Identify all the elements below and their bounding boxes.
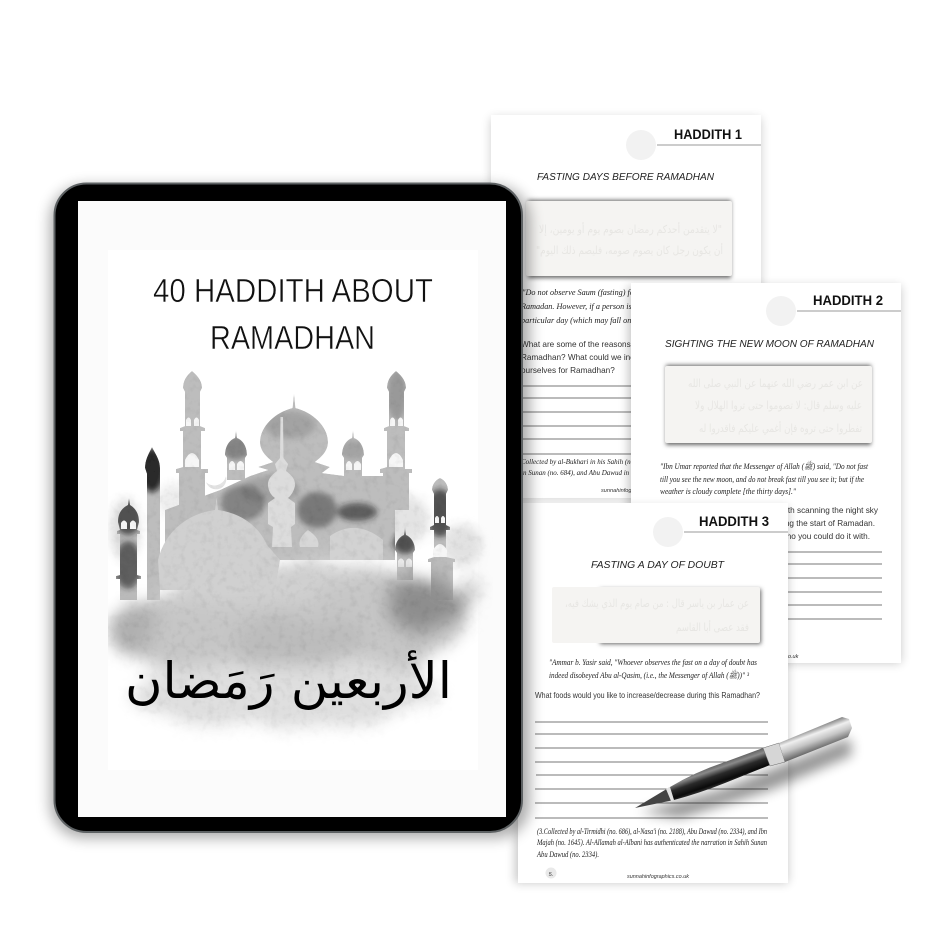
- arabic text box: فقد عصى أبا القاسم: [676, 620, 749, 634]
- hadith translation: particular day (which may fall on these days): [520, 316, 670, 325]
- page: Haddith 2 worksheet: [628, 283, 901, 663]
- pale foreground dome: [158, 497, 280, 590]
- cover title: [153, 272, 433, 356]
- writing lines: [660, 552, 882, 619]
- illustration: watercolour mosque: [105, 365, 486, 731]
- arabic text box: "لا يتقدمن أحدكم رمضان بصوم يوم أو يومين، إلا: [539, 222, 722, 236]
- pen shadow: [640, 738, 852, 818]
- page number: 5.: [549, 872, 553, 878]
- reflection question: Ramadhan? What could we increase in to prepare: [521, 353, 703, 362]
- writing lines: [515, 386, 640, 454]
- arabic text box: [552, 587, 761, 644]
- arabic text box: تفطروا حتى تروه فإن أغمي عليكم فاقدروا له: [699, 421, 862, 435]
- website: sunnahinfographics.co.uk: [601, 488, 666, 494]
- arabic text box: عن عمار بن ياسر قال : من صام يوم الذي يشك فيه،: [565, 597, 749, 610]
- arabic cover title: الأربعين رَمَضان: [125, 650, 452, 710]
- hadith translation: indeed disobeyed Abu al-Qasim, (i.e., the Messenger of Allah (ﷺ))" ³: [549, 669, 749, 680]
- page number: [546, 868, 556, 878]
- hadith translation: till you see the new moon, and do not break fast till you see it; but if the: [660, 475, 864, 484]
- reflection question: Write where you could go and who you could do it with.: [670, 532, 870, 541]
- writing lines: [535, 722, 768, 818]
- hadith translation: [660, 460, 869, 496]
- pale central tower: [268, 417, 295, 547]
- arabic text box: [526, 200, 732, 278]
- header: Haddith 3: HADDITH 3: [699, 513, 769, 529]
- page: Haddith 1 worksheet: [491, 115, 761, 498]
- soft wash behind mosque: [107, 480, 486, 569]
- header: Haddith 2: [766, 292, 901, 326]
- pen collar: [763, 743, 785, 766]
- header: Haddith 2: HADDITH 2: [813, 292, 883, 308]
- right dome lower wash: [330, 528, 383, 560]
- website: sunnahinfographics.co.uk: [627, 874, 690, 880]
- page: Haddith 3 worksheet: [515, 503, 788, 883]
- arabic text box: أن يكون رجل كان يصوم صومه، فليصم ذلك اليوم": [536, 243, 723, 257]
- pen: [635, 717, 852, 818]
- header: Haddith 1: [626, 126, 761, 160]
- hadith translation: "Ammar b. Yasir said, "Whoever observes the fast on a day of doubt has: [549, 658, 757, 667]
- header: Haddith 1: HADDITH 1: [674, 126, 742, 142]
- reflection question: ourselves for Ramadhan?: [521, 366, 615, 375]
- hadith translation: weather is cloudy complete [the thirty days].": [660, 487, 797, 496]
- footnote: Majah (no. 1645). Al-Allamah al-Albani has authenticated the narration in Sahih Sunan: [536, 838, 767, 847]
- arabic text box: عليه وسلم قال: لا تصوموا حتى تروا الهلال ولا: [695, 399, 862, 412]
- hadith translation: Ramadan. However, if a person is in the habit of fasting: [520, 302, 704, 311]
- footnote: in Sunan (no. 684), and Abu Dawud in his Sunan: [521, 469, 659, 477]
- watercolour cloud: [106, 558, 484, 731]
- heading: fasting a day of doubt: FASTING A DAY OF DOUBT: [591, 559, 726, 571]
- arabic text box: [665, 365, 872, 445]
- arabic text box: عن ابن عمر رضي الله عنهما عن النبي صلى الله: [688, 377, 863, 390]
- cover title: RAMADHAN: [210, 319, 375, 356]
- heading: sighting the new moon: SIGHTING THE NEW MOON OF RAMADHAN: [665, 338, 874, 350]
- reflection question: What foods would you like to increase/decrease during this Ramadhan?: [535, 691, 760, 700]
- reflection question: [521, 340, 710, 375]
- footnote: (3.Collected by al-Tirmidhi (no. 686), al-Nasa'i (no. 2188), Abu Dawud (no. 2334), and Ibn: [537, 827, 767, 836]
- reflection question: Plan to spend the 29th and 30th scanning the night sky: [679, 506, 879, 515]
- heading: fasting days before Ramadhan: FASTING DAYS BEFORE RAMADHAN: [537, 171, 714, 183]
- footnote: Abu Dawud (no. 2334).: [536, 850, 599, 859]
- small pale dome: [299, 530, 318, 547]
- crescent: [206, 476, 226, 489]
- pen barrel: [670, 748, 770, 800]
- hadith translation: "Do not observe Saum (fasting) for a day or two before: [522, 288, 703, 297]
- hadith translation: [520, 288, 704, 325]
- cover title: 40 HADDITH ABOUT: [153, 272, 433, 309]
- reflection question: [670, 506, 879, 541]
- pen tip: [635, 787, 674, 808]
- minaret and dome openings: [121, 418, 447, 567]
- reflection question: and reading the rulings regarding the start of Ramadan.: [674, 519, 875, 528]
- pen cap: [779, 717, 852, 762]
- hadith translation: "Ibn Umar reported that the Messenger of Allah (ﷺ) said, "Do not fast: [660, 460, 869, 471]
- footnote: [521, 458, 678, 477]
- footnote: [536, 827, 767, 859]
- reflection question: What are some of the reasons that we should fast in: [521, 340, 710, 349]
- header: Haddith 3: [653, 513, 788, 547]
- hadith translation: [549, 658, 757, 680]
- website: sunnahinfographics.co.uk: [735, 654, 800, 660]
- footnote: Collected by al-Bukhari in his Sahih (no. 1914), Muslim: [521, 458, 678, 466]
- mosque silhouette: [116, 371, 455, 600]
- tablet: [50, 184, 530, 838]
